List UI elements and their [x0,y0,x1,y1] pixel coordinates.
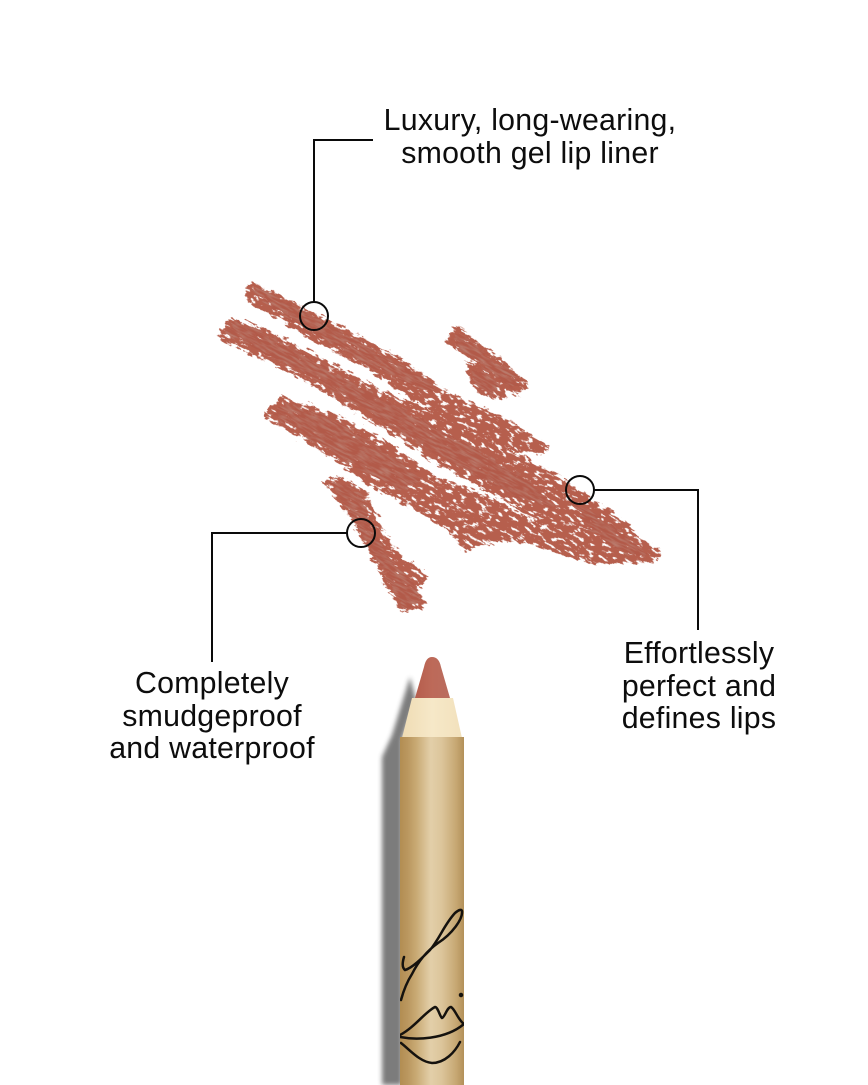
callout: right line [594,490,698,630]
pencil shadow [382,677,416,1085]
callout: left line [212,533,347,662]
text: luxury gel lip liner [384,104,676,170]
lip liner swatch [87,104,792,790]
text: smudgeproof and waterproof [109,667,315,765]
text: effortlessly perfect [622,637,776,735]
text: smudgeproof and waterproof: smudgeproof [122,700,302,732]
pencil [382,657,464,1085]
marker: right circle [566,476,594,504]
text: smudgeproof and waterproof: Completely [135,667,289,700]
text: effortlessly perfect: defines lips [622,702,776,735]
text: effortlessly perfect: Effortlessly [624,637,774,670]
callout: top line [314,140,373,302]
callout lines and circles [212,140,698,662]
swatch: sparse outer strokes [87,104,792,790]
illustration layer [211,139,699,1085]
text: effortlessly perfect: perfect and [622,670,776,702]
pencil wood [402,698,462,738]
text: luxury gel lip liner: Luxury, long-wearing, [384,104,676,137]
pencil lead tip [415,657,450,698]
pencil gold body [400,737,464,1085]
marker: top circle [300,302,328,330]
marker: left circle [347,519,375,547]
swatch: dense stroke cores [91,110,783,785]
pencil logo [400,910,464,1063]
text: luxury gel lip liner: smooth gel lip liner [401,136,659,170]
text: smudgeproof and waterproof: and waterproof [109,732,315,765]
